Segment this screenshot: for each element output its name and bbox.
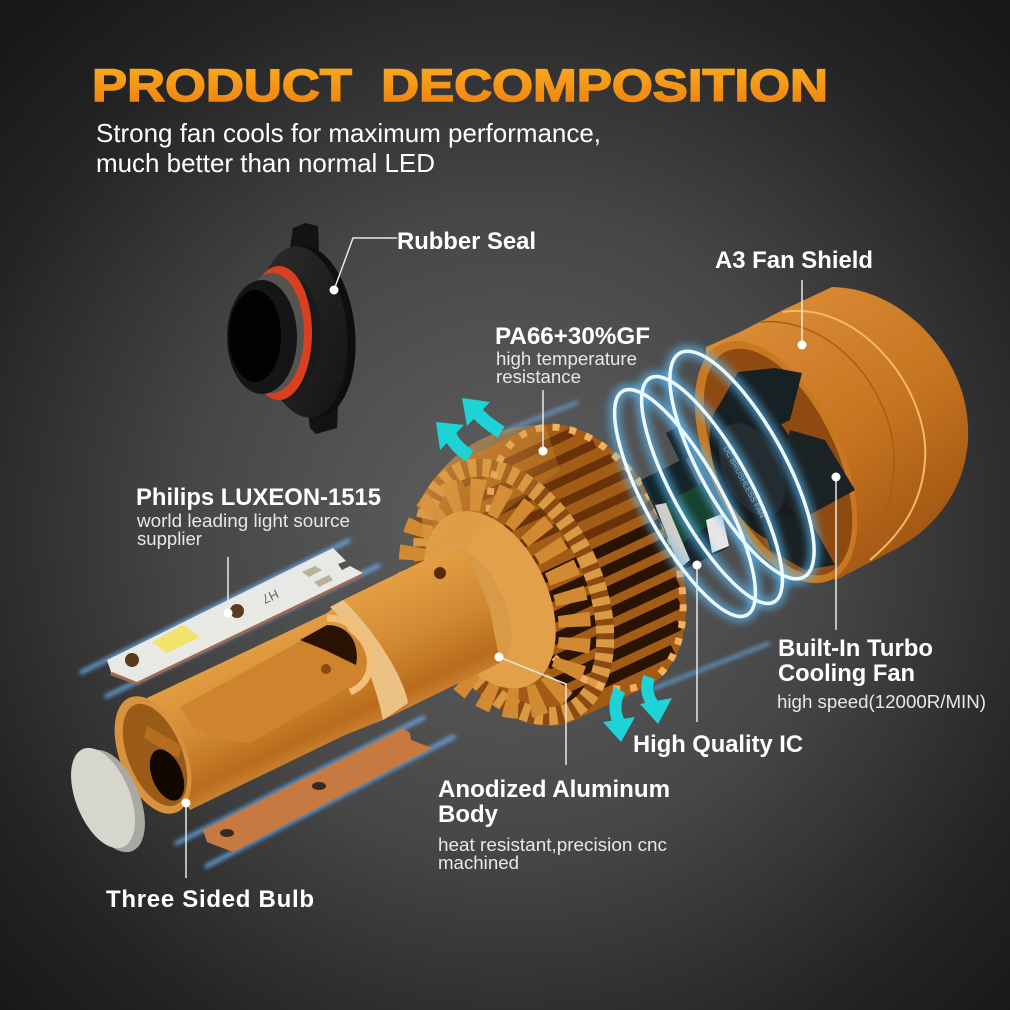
LED circuit board: H7 (260, 586, 281, 607)
label: Philips LUXEON: world leading light source (136, 511, 350, 531)
label: PA66: high temperature (496, 349, 637, 369)
leader lines and dots (182, 238, 840, 878)
fan blades (689, 368, 855, 570)
label: Philips LUXEON: supplier (137, 529, 202, 549)
subtitle: much better than normal LED (96, 148, 435, 178)
airflow arrows bottom (603, 677, 672, 742)
label: turbo fan (777, 635, 986, 712)
rubber seal part (227, 223, 364, 434)
subtitle: Strong fan cools for maximum performance, (96, 118, 601, 148)
label: three sided bulb: Three Sided Bulb (106, 886, 314, 913)
label: turbo fan: Cooling Fan (778, 660, 915, 687)
label: anodized body: machined (438, 853, 519, 873)
label: anodized body: Anodized Aluminum (438, 776, 670, 803)
fin highlight (420, 425, 560, 600)
label: anodized body: Body (438, 801, 499, 828)
IC board (641, 425, 729, 570)
label: turbo fan: Built-In Turbo (778, 635, 933, 662)
glow streaks along strips (80, 540, 455, 867)
LED circuit board (107, 548, 363, 685)
label: PA66: resistance (496, 367, 581, 387)
collar band (330, 600, 408, 720)
LED chip (152, 625, 200, 653)
label: high quality IC: High Quality IC (633, 731, 803, 758)
heat sink (398, 424, 687, 726)
label: PA66: PA66+30%GF (495, 323, 650, 350)
glow streaks behind heat sink (503, 402, 770, 690)
label: anodized body (438, 776, 670, 873)
label: rubber seal: Rubber Seal (397, 228, 536, 255)
airflow arrows top (436, 398, 501, 456)
subtitle (96, 118, 601, 178)
label: A3 fan shield: A3 Fan Shield (715, 247, 873, 274)
fan shield (661, 287, 968, 608)
slot (180, 618, 371, 743)
aluminum tube body (99, 537, 527, 825)
bulb opening (99, 685, 207, 825)
label: Philips LUXEON (136, 484, 381, 549)
label: Philips LUXEON: Philips LUXEON-1515 (136, 484, 381, 511)
label: PA66 (495, 323, 650, 387)
label: anodized body: heat resistant,precision cnc (438, 835, 667, 855)
white disc (58, 739, 158, 862)
copper strip (203, 728, 432, 852)
fan blades: DC BRUSHLESS FAN (721, 445, 767, 520)
label: turbo fan: high speed(12000R/MIN) (777, 692, 986, 712)
cooling rings (590, 333, 841, 633)
title: PRODUCT DECOMPOSITION (92, 60, 828, 111)
